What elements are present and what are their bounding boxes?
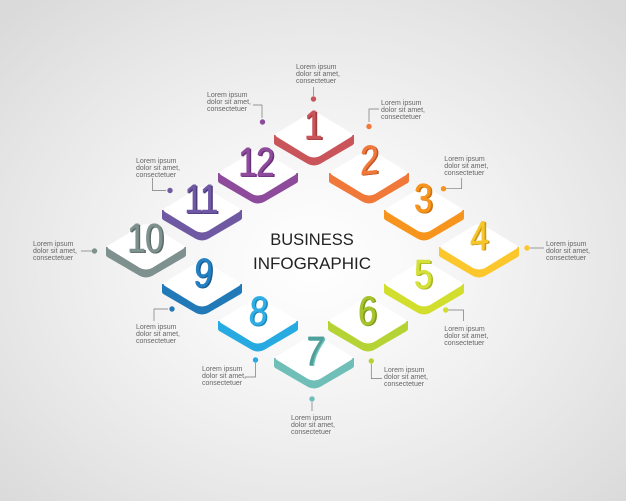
callout 11: dolor sit amet, [136, 165, 180, 172]
step 6 tile [328, 287, 408, 352]
step 11 tile [162, 176, 242, 240]
callout 8: consectetuer [202, 380, 242, 387]
callout 2: dolor sit amet, [381, 107, 425, 114]
step 12 tile [218, 139, 298, 204]
step 3 tile: 3 [414, 175, 432, 221]
callout 11: Lorem ipsum [136, 158, 176, 164]
step 5 tile: 5 [414, 251, 432, 297]
callout 5: Lorem ipsum [444, 326, 485, 332]
callout 9 [136, 306, 180, 345]
callout 8 [202, 357, 258, 387]
callout 7 [291, 396, 335, 436]
step 8 tile [218, 288, 298, 352]
callout 4: dolor sit amet, [546, 248, 590, 255]
step 1 tile: 1 [304, 102, 322, 148]
step 5 tile [384, 251, 464, 314]
callout 4: consectetuer [546, 255, 586, 262]
callout 12 [207, 92, 266, 125]
step 8 tile: 8 [247, 288, 269, 334]
step 4 tile: 4 [470, 212, 488, 260]
callout 4: Lorem ipsum [546, 240, 586, 248]
callout 5: consectetuer [444, 340, 484, 347]
callout 5 [443, 307, 488, 347]
callout 6: Lorem ipsum [384, 366, 424, 374]
step 4 tile [439, 212, 519, 278]
callout 2: consectetuer [381, 114, 421, 121]
callout 11: consectetuer [136, 172, 176, 179]
callout 10 [33, 240, 98, 262]
step 1 tile [274, 102, 354, 166]
callout 5: dolor sit amet, [444, 333, 488, 340]
step 12 tile: 12 [238, 139, 274, 185]
callout 6: consectetuer [384, 381, 424, 388]
callout 6 [368, 358, 428, 388]
callout 7: Lorem ipsum [291, 414, 331, 422]
step 9 tile [162, 250, 242, 314]
callout 7: dolor sit amet, [291, 422, 335, 429]
step 7 tile [274, 328, 354, 388]
step 10 tile [106, 215, 186, 278]
callout 10: Lorem ipsum [33, 240, 73, 248]
callout 12: consectetuer [207, 106, 247, 113]
callout 3: dolor sit amet, [444, 163, 488, 170]
callout 8: Lorem ipsum [202, 366, 242, 372]
callout 1: Lorem ipsum [296, 64, 336, 70]
callout 3: consectetuer [444, 170, 484, 177]
callout 12: dolor sit amet, [207, 99, 251, 106]
callout 1: consectetuer [296, 78, 336, 85]
callout 12: Lorem ipsum [207, 92, 247, 98]
callout 9: dolor sit amet, [136, 331, 180, 338]
callout 4 [524, 240, 590, 262]
step 7 tile: 7 [302, 328, 326, 374]
callout 1: dolor sit amet, [296, 71, 340, 78]
callout 6: dolor sit amet, [384, 374, 428, 381]
callout 10: dolor sit amet, [33, 248, 77, 255]
step 6 tile: 6 [358, 287, 376, 335]
callout 2: Lorem ipsum [381, 100, 421, 106]
callout 10: consectetuer [33, 255, 73, 262]
title: INFOGRAPHIC [253, 254, 371, 273]
callout 1 [296, 64, 340, 102]
callout 2 [366, 100, 425, 130]
step 3 tile [384, 175, 464, 240]
callout 3: Lorem ipsum [444, 156, 485, 162]
callout 9: consectetuer [136, 338, 176, 345]
callout 9: Lorem ipsum [136, 324, 176, 330]
title: BUSINESS [270, 231, 354, 249]
callout 3 [440, 156, 488, 192]
step 2 tile [329, 136, 409, 204]
step 10 tile: 10 [127, 215, 163, 261]
step 2 tile: 2 [360, 136, 378, 184]
step 11 tile: 11 [184, 176, 218, 222]
callout 11 [136, 158, 180, 194]
title [253, 231, 371, 273]
callout 7: consectetuer [291, 429, 331, 436]
step 9 tile: 9 [192, 250, 214, 296]
callout 8: dolor sit amet, [202, 373, 246, 380]
